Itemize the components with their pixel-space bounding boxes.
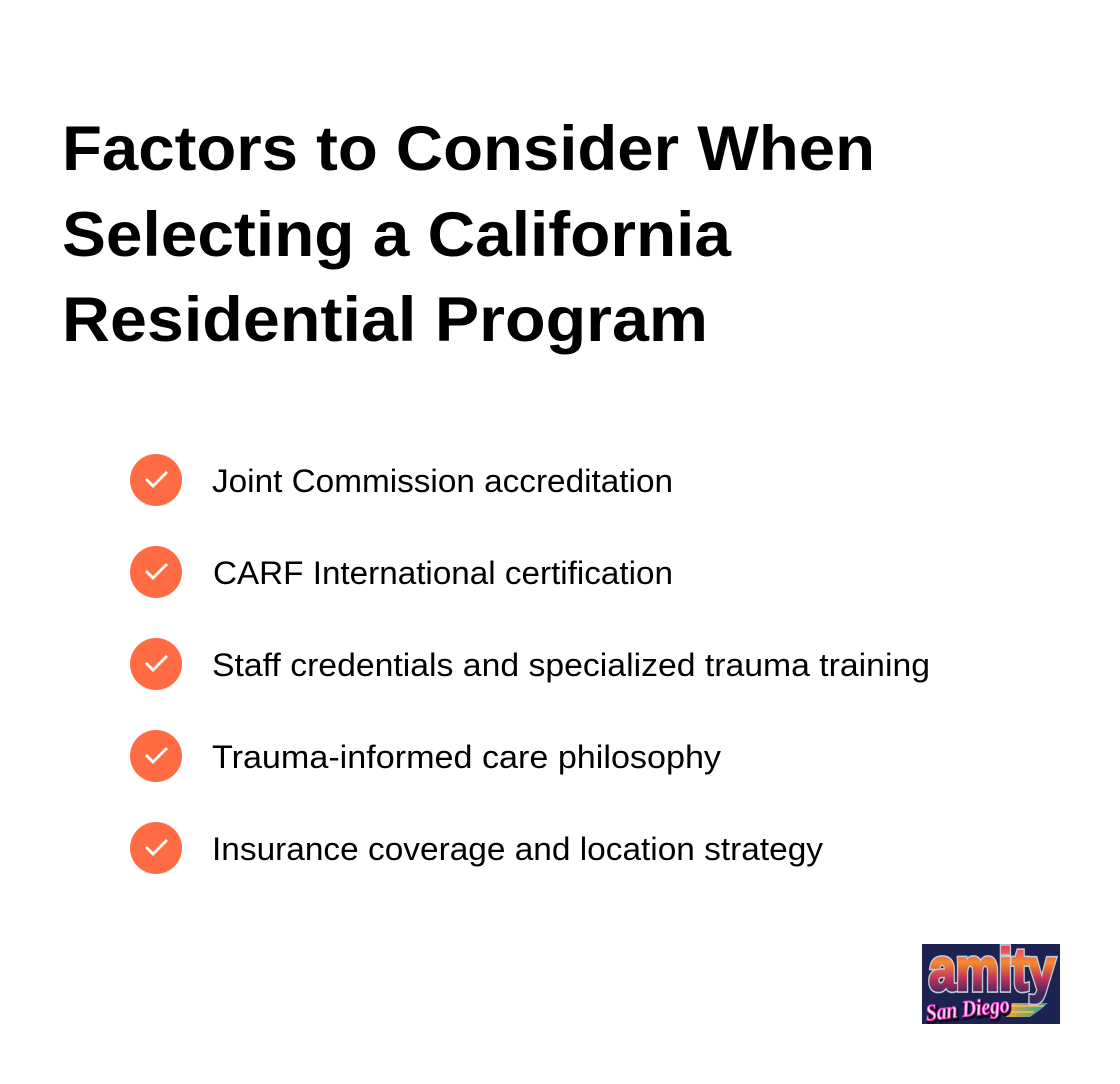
item: Staff credentials and specialized trauma training: [130, 638, 930, 690]
title: Residential Program: [62, 285, 708, 355]
item: Trauma-informed care philosophy: Trauma-informed care philosophy: [212, 739, 721, 775]
logo: Amity San Diego: San Diego: [926, 994, 1012, 1027]
item: Joint Commission accreditation: Joint Commission accreditation: [212, 463, 673, 499]
item: CARF International certification: CARF International certification: [213, 555, 673, 591]
item: CARF International certification: [130, 546, 673, 598]
logo: Amity San Diego: amity: [929, 937, 1055, 1003]
item: Trauma-informed care philosophy: [130, 730, 721, 782]
logo: Amity San Diego: San Diego: [925, 992, 1011, 1026]
item: Insurance coverage and location strategy: [130, 822, 823, 874]
item: Insurance coverage and location strategy: Insurance coverage and location strategy: [212, 831, 823, 867]
title: [62, 114, 875, 355]
logo: Amity San Diego: amity: [929, 937, 1055, 1003]
checklist: [130, 454, 930, 874]
logo: Amity San Diego: [922, 937, 1060, 1027]
title: Selecting a California: [62, 200, 732, 270]
item: Staff credentials and specialized trauma training: Staff credentials and specialized trauma training: [212, 647, 930, 683]
item: Joint Commission accreditation: [130, 454, 673, 506]
title: Factors to Consider When: [62, 114, 875, 184]
